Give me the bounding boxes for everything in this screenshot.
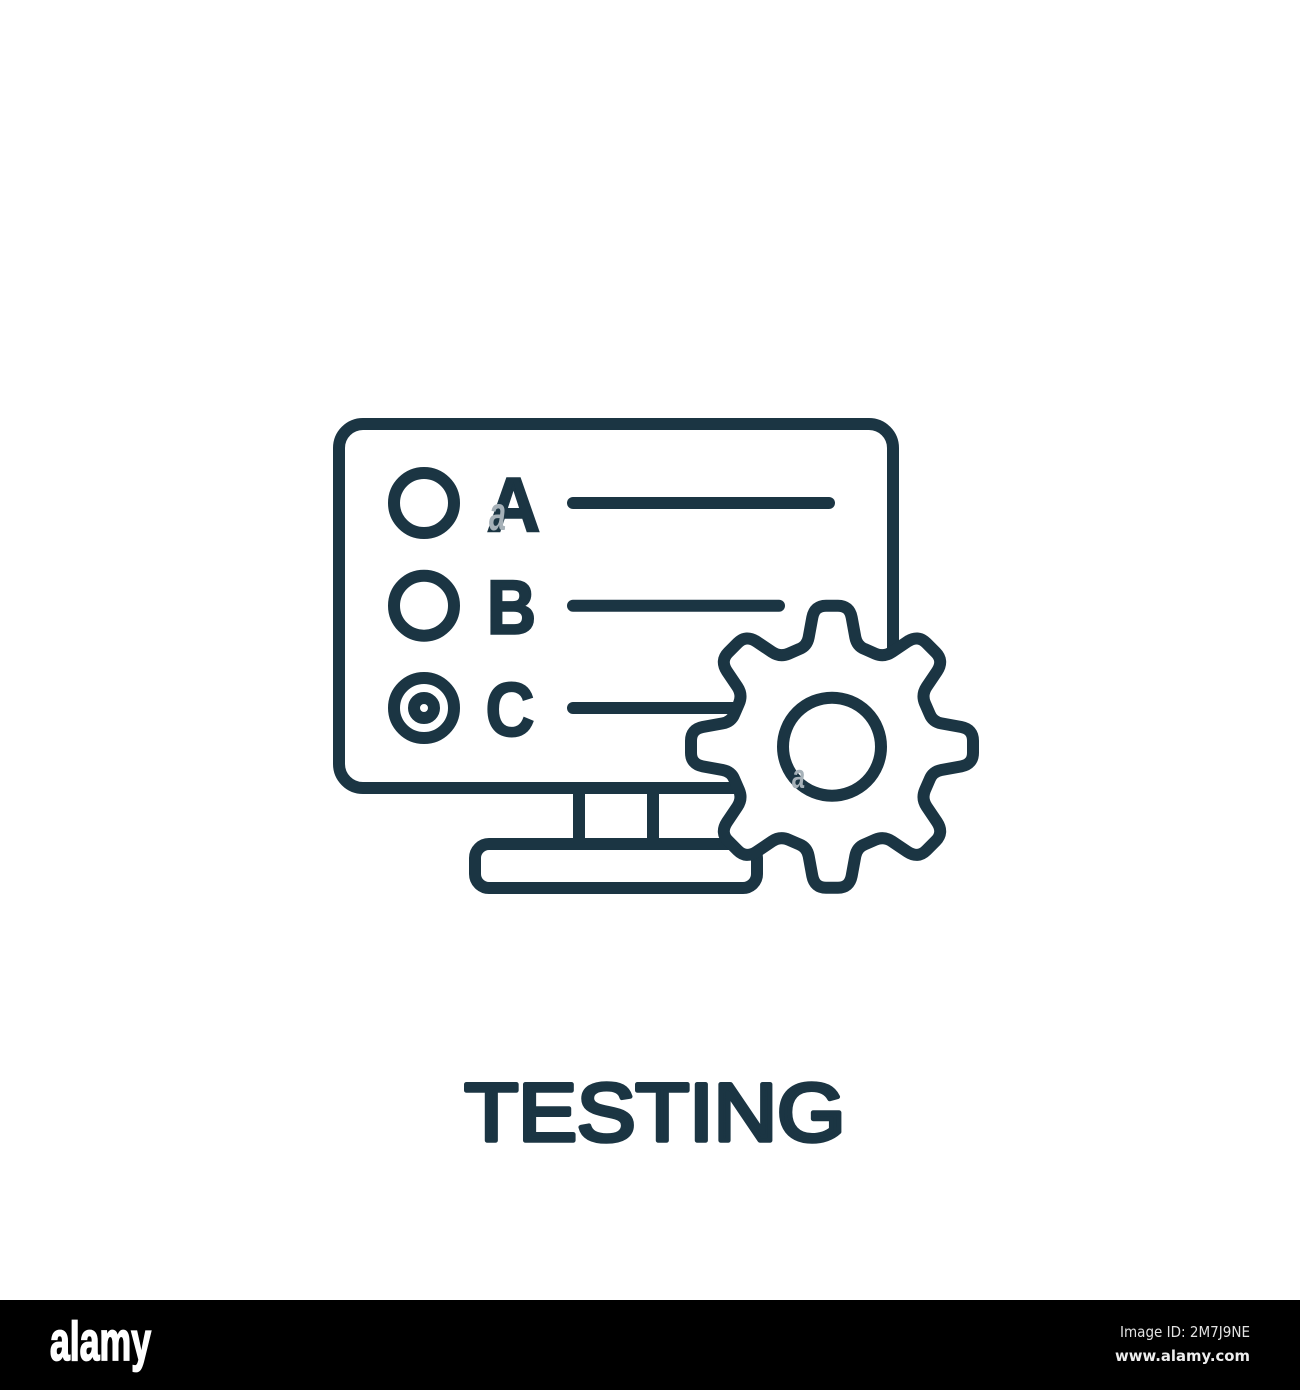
image ID: Image ID: 2M7J9NE — [1120, 1323, 1250, 1341]
option C selected radio button — [394, 678, 454, 738]
option A letter: A — [487, 463, 540, 548]
footer bar — [0, 1300, 1300, 1390]
icon: computer monitor with test and gear — [339, 424, 973, 888]
watermark fragment on gear: a — [792, 758, 805, 796]
watermark fragment: a — [489, 488, 506, 541]
monitor stand base — [475, 844, 757, 888]
monitor screen — [339, 424, 893, 788]
alamy logo: alamy — [50, 1310, 151, 1372]
gear centre hole — [783, 698, 881, 796]
option A answer line — [573, 497, 829, 509]
gear outline — [691, 606, 973, 888]
option C answer line — [573, 702, 750, 714]
option C letter: C — [486, 668, 534, 753]
monitor stand neck — [579, 788, 653, 844]
title: TESTING — [464, 1068, 846, 1159]
option B answer line — [573, 600, 779, 612]
gear — [691, 606, 973, 888]
website URL: www.alamy.com — [1115, 1347, 1250, 1365]
option B radio button — [394, 576, 454, 636]
option A radio button — [394, 473, 454, 533]
option B letter: B — [487, 566, 536, 650]
